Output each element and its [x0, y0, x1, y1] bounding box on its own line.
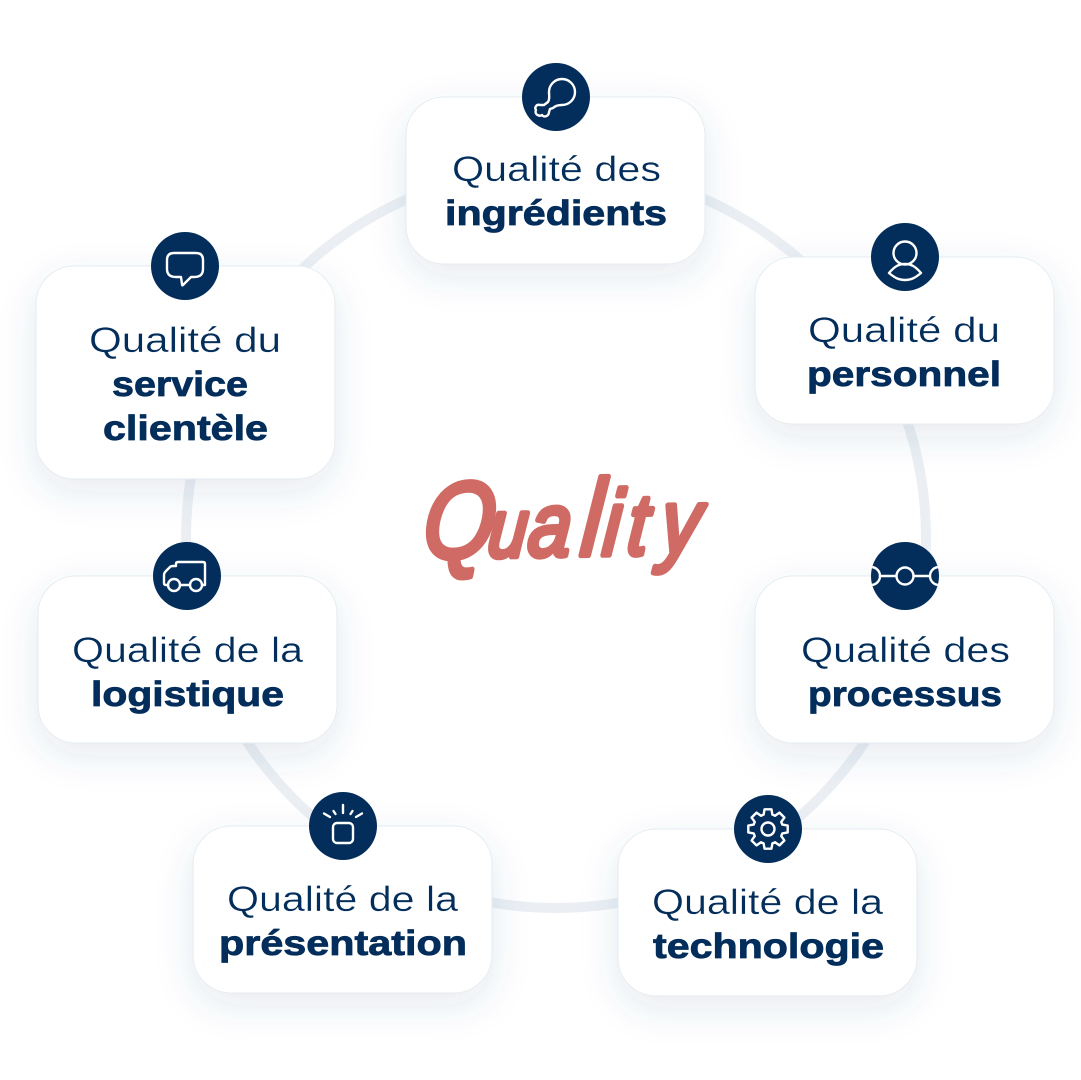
text: ingredients label: Qualité des: [452, 150, 661, 189]
text: personnel label: [807, 311, 1001, 394]
panel: personnel: [755, 223, 1054, 424]
text: ingredients label: [445, 150, 667, 233]
centre title: Quality: Q: [419, 460, 501, 582]
text: presentation label: Qualité de la: [227, 880, 459, 919]
text: logistics label: logistique: [91, 675, 284, 714]
text: ingredients label: ingrédients: [445, 194, 667, 233]
icon: speech bubble: [151, 232, 219, 300]
centre title: Quality: u: [485, 483, 532, 575]
icon: gear: [734, 795, 802, 863]
text: logistics label: [72, 631, 304, 714]
panel: presentation: [193, 792, 492, 993]
text: presentation label: [219, 880, 467, 963]
panel: logistics: [38, 542, 337, 743]
icon: presentation light: [309, 792, 377, 860]
centre title: Quality: i: [600, 472, 628, 575]
icon: person: [871, 223, 939, 291]
icon: drumstick: [522, 63, 590, 131]
text: customer service label: Qualité du: [89, 321, 281, 360]
panel: technology: [618, 795, 917, 996]
text: logistics label: Qualité de la: [72, 631, 304, 670]
text: processes label: processus: [808, 675, 1002, 714]
ring connecting the cards: [186, 168, 926, 908]
centre title: Quality: y: [653, 470, 710, 574]
text: personnel label: Qualité du: [808, 311, 1000, 350]
text: customer service label: service: [112, 365, 248, 404]
text: personnel label: personnel: [807, 355, 1001, 394]
text: presentation label: présentation: [219, 924, 467, 963]
text: processes label: Qualité des: [801, 631, 1010, 670]
centre title: Quality: t: [624, 477, 657, 573]
text: technology label: technologie: [653, 927, 884, 966]
panel: customer service: [36, 232, 335, 479]
panel: ingredients: [406, 63, 705, 264]
centre title: Quality: a: [525, 474, 576, 576]
text: technology label: [652, 883, 884, 966]
icon: truck: [153, 542, 221, 610]
panel: processes: [755, 542, 1054, 743]
icon: process chain: [871, 542, 939, 610]
text: customer service label: clientèle: [103, 409, 268, 448]
text: processes label: [801, 631, 1010, 714]
text: customer service label: [89, 321, 281, 448]
text: technology label: Qualité de la: [652, 883, 884, 922]
centre title: Quality: l: [577, 458, 611, 579]
